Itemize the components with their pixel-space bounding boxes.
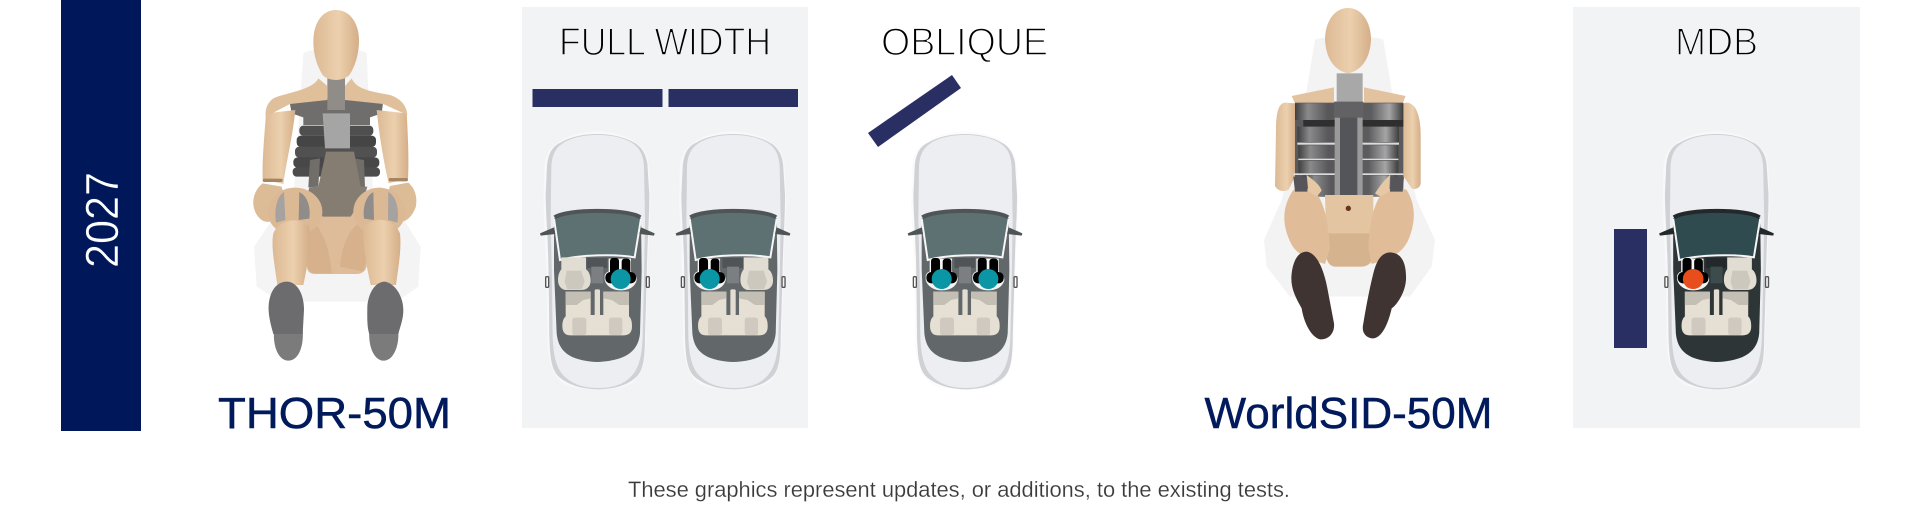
lower pelvis [1327,233,1372,267]
car with right front occupant [540,131,655,390]
heading: oblique: OBLIQUE [881,21,1048,64]
head [313,10,359,80]
abdomen plate [307,152,367,217]
car with left front occupant [676,131,790,390]
panel: MDB [1573,7,1860,428]
hands [253,183,416,222]
rib stack [293,126,380,177]
knees [268,188,405,236]
footnote: These graphics represent updates, or additions, to the existing tests. [628,477,1290,502]
THOR-50M dummy illustration [253,10,421,361]
dummy name: THOR-50M: THOR-50M [218,389,451,438]
WorldSID-50M dummy illustration [1264,8,1435,339]
barrier: full width left [532,89,662,107]
thorax ribs [1293,102,1403,198]
pelvis and thighs [307,213,367,274]
barrier: oblique [868,75,961,147]
chest hardware [289,98,383,125]
year banner [61,0,141,431]
head [1325,8,1371,73]
hip hole [1346,206,1351,211]
thighs [1284,188,1414,264]
shoulders [1292,87,1406,103]
neck [1337,73,1363,103]
heading: full width: FULL WIDTH [559,21,771,64]
car with driver occupant [1659,131,1774,390]
year label: 2027 [76,172,128,268]
neck hardware [327,73,345,110]
barrier: MDB [1614,229,1647,348]
thigh straps [1293,175,1404,197]
shoes [269,282,403,361]
dummy name: WorldSID-50M: WorldSID-50M [1204,389,1492,438]
pelvis [1325,195,1373,267]
shoulders [266,78,407,117]
seat silhouette [1264,36,1435,297]
seat silhouette [254,48,421,302]
barrier: full width right [668,89,798,107]
car with both front occupants [908,131,1022,390]
arms [1275,103,1421,191]
lower legs [272,220,400,285]
panel: oblique [868,21,1048,390]
heading: MDB: MDB [1675,21,1758,64]
panel: full width [522,7,808,428]
shoes [1291,252,1406,339]
arms [263,110,408,184]
brackets [308,158,365,187]
sternum hardware [323,113,350,148]
